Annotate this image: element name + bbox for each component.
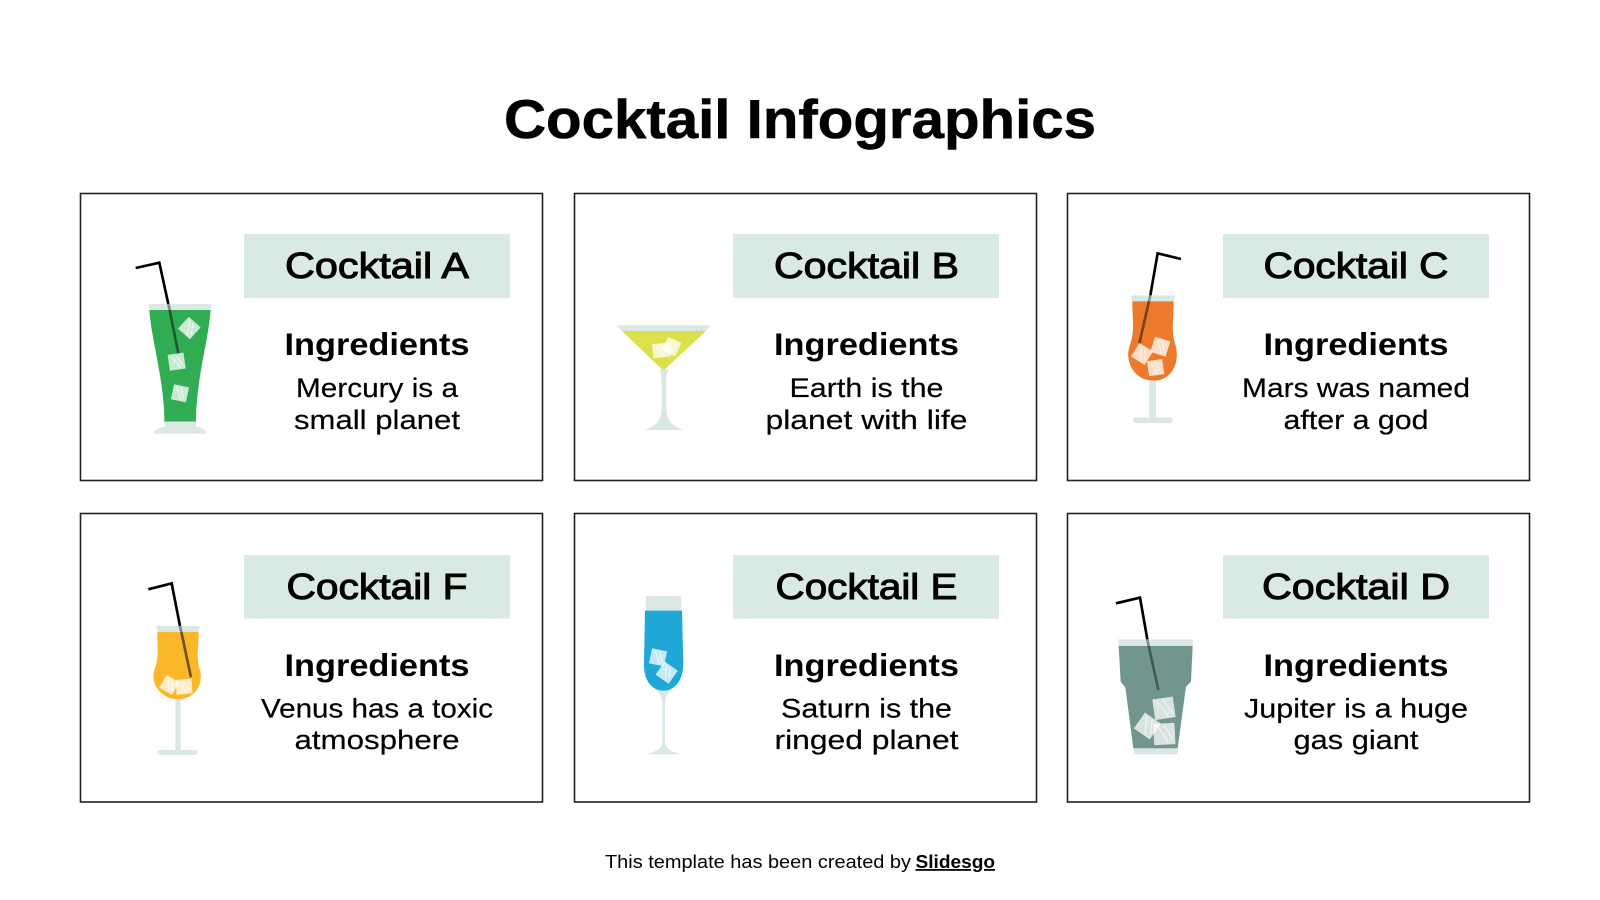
- text block: description: after a god: [1284, 405, 1428, 435]
- icon: green highball glass: [136, 263, 212, 434]
- title: Cocktail Infographics: [504, 88, 1096, 150]
- panel: Cocktail D: [1068, 514, 1530, 802]
- heading: ingredients: Ingredients: [284, 326, 470, 362]
- text block: description: [766, 373, 968, 435]
- text block: description: [1242, 373, 1470, 435]
- text block: description: Venus has a toxic: [261, 694, 493, 724]
- heading: ingredients: Ingredients: [774, 647, 959, 683]
- text block: description: [261, 694, 493, 755]
- label: Cocktail A: [244, 234, 510, 298]
- heading: ingredients: Ingredients: [284, 647, 470, 683]
- label: Cocktail B: Cocktail B: [774, 245, 959, 286]
- text block: description: [294, 373, 461, 435]
- icon: grey-green tumbler glass: [1116, 598, 1193, 754]
- label: Cocktail B: [733, 234, 999, 298]
- label: Cocktail E: [733, 555, 999, 618]
- icon: amber tulip glass: [148, 583, 201, 755]
- text block: description: atmosphere: [294, 725, 460, 755]
- label: Cocktail A: Cocktail A: [285, 245, 469, 286]
- panel: Cocktail B: [574, 194, 1036, 480]
- text block: description: Earth is the: [790, 373, 944, 403]
- panel: Cocktail E: [574, 514, 1036, 802]
- label: Cocktail C: Cocktail C: [1264, 245, 1448, 286]
- text block: description: gas giant: [1294, 725, 1419, 755]
- text block: description: [1244, 694, 1468, 755]
- icon: blue flute glass: [644, 596, 683, 754]
- heading: ingredients: Ingredients: [1264, 647, 1448, 683]
- text block: description: Jupiter is a huge: [1244, 694, 1468, 724]
- panel: Cocktail C: [1068, 194, 1530, 480]
- text block: description: Mercury is a: [296, 373, 459, 403]
- panel: Cocktail F: [80, 514, 542, 802]
- text block: description: ringed planet: [774, 725, 959, 755]
- footer credit: This template has been created by: [605, 852, 911, 872]
- label: Cocktail C: [1223, 234, 1489, 298]
- label: Cocktail F: Cocktail F: [286, 566, 468, 607]
- heading: ingredients: Ingredients: [1264, 326, 1448, 362]
- label: Cocktail D: [1223, 555, 1489, 618]
- label: Cocktail E: Cocktail E: [776, 566, 958, 607]
- text block: description: small planet: [294, 405, 461, 435]
- label: Cocktail F: [244, 555, 510, 618]
- heading: ingredients: Ingredients: [774, 326, 959, 362]
- text block: description: Saturn is the: [781, 694, 952, 724]
- icon: orange hurricane glass: [1128, 253, 1181, 423]
- text block: description: planet with life: [766, 405, 968, 435]
- footer credit: Slidesgo: [916, 852, 995, 872]
- label: Cocktail D: Cocktail D: [1262, 566, 1450, 607]
- text block: description: [774, 694, 959, 755]
- panel: Cocktail A: [80, 194, 542, 480]
- text block: description: Mars was named: [1242, 373, 1470, 403]
- icon: yellow martini glass: [617, 325, 711, 430]
